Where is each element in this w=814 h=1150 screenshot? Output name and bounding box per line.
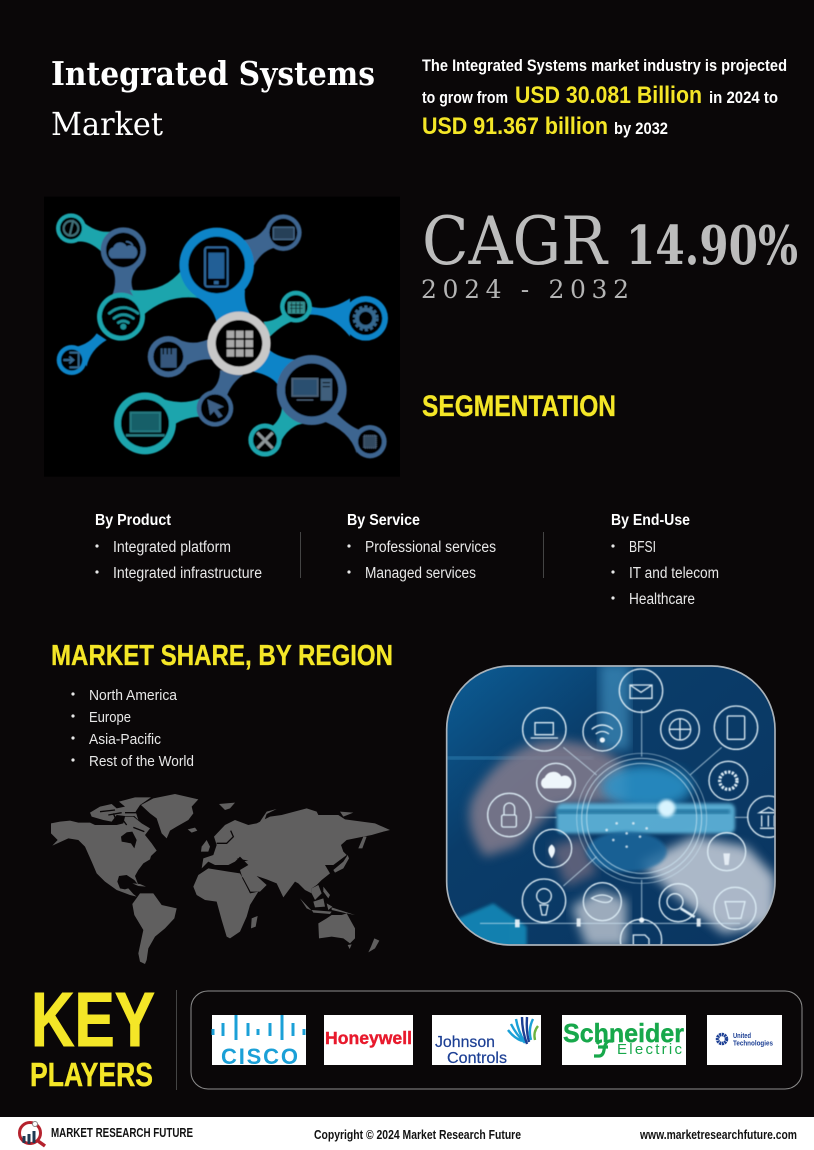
logo: United Technologies xyxy=(707,1015,782,1065)
region list: Europe xyxy=(89,709,131,726)
logo: United Technologies: United xyxy=(733,1031,751,1040)
market forecast text: in 2024 to xyxy=(709,88,778,107)
CAGR figure: CAGR xyxy=(422,203,609,280)
CAGR figure: 2024 - 2032 xyxy=(421,275,629,304)
logo: Cisco xyxy=(212,1015,306,1069)
node: cloud xyxy=(101,227,146,273)
segment: by end-use: By End-Use xyxy=(611,512,690,529)
segment: by service: Managed services xyxy=(365,565,476,582)
icon: market research future logo xyxy=(20,1122,45,1146)
map: Americas and Greenland xyxy=(51,794,210,964)
footer xyxy=(0,1117,814,1150)
key players heading: PLAYERS xyxy=(30,1056,153,1093)
node: music xyxy=(56,213,86,243)
heading: segmentation: SEGMENTATION xyxy=(422,390,616,423)
photo rings and links xyxy=(480,710,748,923)
market forecast text: USD 91.367 billion xyxy=(422,113,608,140)
node: gear xyxy=(343,296,388,341)
segment: by service: By Service xyxy=(347,512,420,529)
region list: North America xyxy=(89,687,178,704)
illustration: connected devices network xyxy=(44,197,400,477)
photo icon circles xyxy=(488,669,789,961)
logo: Schneider Electric: Schneider xyxy=(563,1018,684,1048)
photo: hand with floating technology icons xyxy=(446,665,776,946)
segment: by service: Professional services xyxy=(365,539,496,556)
logo: Johnson Controls: Johnson xyxy=(435,1034,495,1051)
copyright: Copyright © 2024 Market Research Future xyxy=(314,1127,521,1142)
title: Integrated Systems xyxy=(51,54,375,93)
node: login xyxy=(57,345,87,375)
logo: Schneider Electric: Electric xyxy=(617,1041,682,1058)
node: chip xyxy=(353,425,387,458)
logo: Cisco: CISCO xyxy=(221,1044,298,1069)
node: desktop computer xyxy=(277,355,347,425)
logo: Honeywell xyxy=(324,1015,413,1065)
heading: market share by region: MARKET SHARE, BY REGION xyxy=(51,640,393,672)
market forecast text: to grow from xyxy=(422,88,508,107)
node: keyboard xyxy=(280,291,312,323)
region list: Rest of the World xyxy=(89,753,194,770)
node: central app grid xyxy=(207,312,271,375)
segment: by end-use: Healthcare xyxy=(629,591,695,608)
logo: Honeywell: Honeywell xyxy=(325,1028,412,1048)
network connectors xyxy=(77,216,360,453)
node: memory card xyxy=(148,336,189,377)
key players heading xyxy=(30,977,155,1093)
logo: Schneider Electric xyxy=(562,1015,686,1065)
market forecast text: by 2032 xyxy=(614,119,668,138)
photo filled glyphs xyxy=(515,737,730,927)
segment: by product: Integrated infrastructure xyxy=(113,565,262,582)
node: tablet xyxy=(265,214,302,251)
segment: by end-use: IT and telecom xyxy=(629,565,719,582)
market forecast text xyxy=(422,56,787,140)
logo: Johnson Controls: Controls xyxy=(447,1050,507,1067)
node: cursor xyxy=(197,390,233,427)
title xyxy=(51,54,375,143)
segment: by service xyxy=(347,512,496,582)
market forecast text: USD 30.081 Billion xyxy=(515,82,702,109)
CAGR figure xyxy=(421,203,798,304)
segment: by product xyxy=(95,512,262,582)
map: Eurasia, Africa and Oceania xyxy=(193,803,390,952)
world map xyxy=(51,794,390,964)
node: laptop xyxy=(114,392,176,454)
region list xyxy=(71,687,194,770)
segment: by end-use: BFSI xyxy=(629,539,656,556)
node: tools xyxy=(248,423,282,457)
logo: Johnson Controls xyxy=(432,1015,541,1067)
title: Market xyxy=(51,105,163,143)
key players heading: KEY xyxy=(31,977,155,1063)
segment: by product: Integrated platform xyxy=(113,539,231,556)
region list: Asia-Pacific xyxy=(89,731,161,748)
node: wifi xyxy=(97,293,145,341)
footer brand: MARKET RESEARCH FUTURE xyxy=(51,1126,193,1140)
segment: by product: By Product xyxy=(95,512,172,529)
logo: United Technologies: Technologies xyxy=(733,1038,773,1048)
node: smartphone xyxy=(179,228,254,302)
segment: by end-use xyxy=(611,512,719,608)
key players panel xyxy=(191,991,802,1089)
